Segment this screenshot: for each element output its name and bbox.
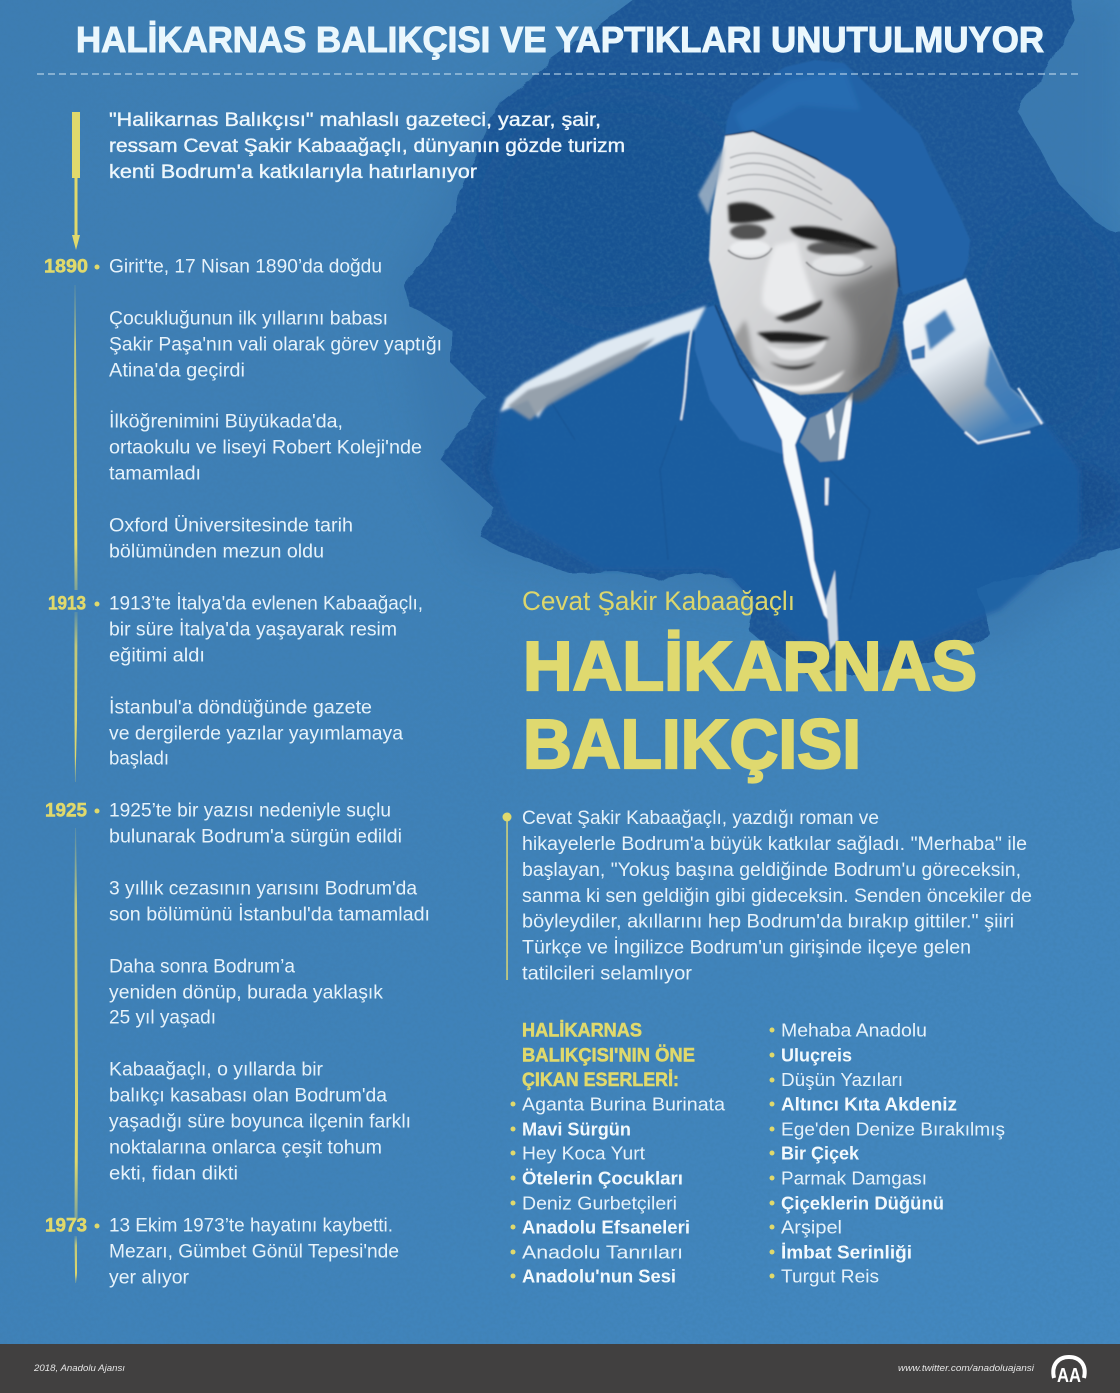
timeline text: ve dergilerde yazılar yayımlamaya [109, 724, 403, 744]
timeline text: İstanbul'a döndüğünde gazete [109, 698, 372, 718]
timeline text [109, 256, 442, 1288]
works list: left column: Anadolu'nun Sesi [522, 1266, 676, 1286]
timeline text: Şakir Paşa'nın vali olarak görev yaptığı [109, 334, 442, 356]
timeline text: 25 yıl yaşadı [109, 1008, 216, 1028]
works list: left column: Deniz Gurbetçileri [522, 1192, 677, 1214]
timeline text: ortaokulu ve liseyi Robert Koleji'nde [109, 438, 422, 458]
timeline text: tamamladı [109, 464, 201, 484]
hair [698, 145, 725, 215]
cheek shadow [733, 320, 763, 372]
nose [762, 240, 815, 315]
timeline text: Oxford Üniversitesinde tarih [109, 516, 353, 536]
sleeve cuff [965, 388, 1042, 443]
works list: left column: Mavi Sürgün [522, 1118, 631, 1140]
lapel [695, 305, 790, 455]
intro arrow [72, 112, 80, 250]
footer [0, 1344, 1120, 1393]
paragraph: hikayelerle Bodrum'a büyük katkılar sağladı. "Merhaba" ile [522, 834, 1027, 855]
works heading: ÇIKAN ESERLERİ: [522, 1070, 679, 1091]
works list: right column: İmbat Serinliği [781, 1242, 912, 1262]
shirt [752, 378, 832, 625]
works list: right column: Parmak Damgası [781, 1168, 927, 1188]
shoulder highlight [500, 306, 706, 418]
eye sockets [730, 224, 766, 240]
jacket seam [681, 322, 693, 420]
intro text: kenti Bodrum'a katkılarıyla hatırlanıyor [109, 162, 478, 183]
timeline text: bölümünden mezun oldu [109, 542, 324, 562]
works list: left column: Ötelerin Çocukları [522, 1168, 683, 1188]
timeline years: 1890 [44, 256, 88, 278]
timeline years: 1925 [45, 800, 87, 822]
timeline text: 13 Ekim 1973’te hayatını kaybetti. [109, 1216, 393, 1236]
timeline text: noktalarına onlarca çeşit tohum [109, 1138, 382, 1158]
timeline text: bir süre İtalya'da yaşayarak resim [109, 620, 397, 640]
timeline text: Çocukluğunun ilk yıllarını babası [109, 308, 388, 330]
timeline text: Girit'te, 17 Nisan 1890’da doğdu [109, 256, 382, 278]
works list: right column: Arşipel [781, 1216, 842, 1238]
works heading: HALİKARNAS [522, 1020, 642, 1042]
works list: left column: Hey Koca Yurt [522, 1142, 645, 1164]
timeline text: Daha sonra Bodrum’a [109, 956, 295, 978]
timeline text: Mezarı, Gümbet Gönül Tepesi'nde [109, 1242, 399, 1262]
timeline years: 1913 [48, 594, 86, 614]
works list: right column: Ege'den Denize Bırakılmış [781, 1118, 1005, 1140]
main heading: HALİKARNAS [523, 627, 977, 705]
timeline text: yer alıyor [109, 1268, 190, 1288]
timeline text: başladı [109, 748, 169, 770]
icon: AA logo: AA [1057, 1365, 1081, 1387]
works list: right column: Turgut Reis [781, 1266, 879, 1286]
main heading: BALIKÇISI [523, 705, 861, 783]
face [708, 130, 900, 396]
subtitle: name: Cevat Şakir Kabaağaçlı [522, 586, 795, 616]
paragraph: sanma ki sen geldiğin gibi gideceksin. Senden öncekiler de [522, 886, 1032, 907]
timeline text: balıkçı kasabası olan Bodrum'da [109, 1086, 387, 1106]
works list: left column [510, 1094, 726, 1286]
timeline text: Atina'da geçirdi [109, 360, 245, 382]
works list: left column: Anadolu Efsaneleri [522, 1216, 690, 1238]
intro text: "Halikarnas Balıkçısı" mahlaslı gazeteci, yazar, şair, [109, 110, 601, 131]
jaw beard shadow [848, 330, 899, 402]
works list: right column: Altıncı Kıta Akdeniz [781, 1094, 957, 1114]
jacket [490, 305, 1080, 650]
timeline text: ekti, fidan dikti [109, 1164, 238, 1184]
works heading [522, 1020, 695, 1091]
under-eye bags [728, 248, 872, 275]
forehead wrinkles [727, 153, 842, 220]
footer credit: 2018, Anadolu Ajansı [33, 1363, 125, 1374]
timeline text: 1925’te bir yazısı nedeniyle suçlu [109, 800, 391, 822]
works heading: BALIKÇISI'NIN ÖNE [522, 1046, 695, 1066]
timeline years [44, 256, 88, 1236]
works list: right column: Uluçreis [781, 1044, 852, 1066]
portrait of Cevat Şakir Kabaağaçlı [490, 60, 1080, 650]
eyebrows [728, 202, 775, 223]
title: HALİKARNAS BALIKÇISI VE YAPTIKLARI UNUTULMUYOR [76, 19, 1044, 60]
jacket fold lines [550, 400, 870, 600]
paragraph: tatilcileri selamlıyor [522, 964, 693, 984]
timeline text: yeniden dönüp, burada yaklaşık [109, 982, 383, 1004]
works list: left column: Anadolu Tanrıları [522, 1242, 683, 1262]
works list: left column: Aganta Burina Burinata [522, 1094, 726, 1114]
paragraph: böyleydiler, akıllarını hep Bodrum'da bırakıp gittiler." şiiri [522, 912, 1014, 932]
intro text [109, 110, 625, 183]
timeline text: bulunarak Bodrum'a sürgün edildi [109, 826, 402, 848]
timeline text: son bölümünü İstanbul'da tamamladı [109, 904, 430, 926]
footer link: www.twitter.com/anadoluajansi [898, 1363, 1035, 1374]
timeline text: eğitimi aldı [109, 646, 205, 666]
icon: AA logo [1053, 1357, 1085, 1387]
paragraph: Türkçe ve İngilizce Bodrum'un girişinde ilçeye gelen [522, 938, 971, 958]
timeline years: 1973 [45, 1216, 87, 1236]
works list: right column: Mehaba Anadolu [781, 1020, 927, 1040]
works list: right column: Çiçeklerin Düğünü [781, 1192, 944, 1214]
paragraph: Cevat Şakir Kabaağaçlı, yazdığı roman ve [522, 808, 879, 829]
mouth [757, 332, 830, 343]
timeline text: İlköğrenimini Büyükada'da, [109, 412, 343, 432]
timeline text: Kabaağaçlı, o yıllarda bir [109, 1060, 324, 1080]
timeline text: 3 yıllık cezasının yarısını Bodrum'da [109, 878, 417, 900]
timeline text: yaşadığı süre boyunca ilçenin farklı [109, 1112, 411, 1132]
intro text: ressam Cevat Şakir Kabaağaçlı, dünyanın gözde turizm [109, 136, 625, 157]
timeline text: 1913’te İtalya'da evlenen Kabaağaçlı, [109, 594, 423, 614]
hat [725, 60, 970, 295]
paragraph marker [502, 812, 512, 980]
hand [903, 278, 1045, 443]
works list: right column: Bir Çiçek [781, 1142, 860, 1164]
watercolour wash [390, 0, 1120, 673]
works list: right column [770, 1020, 1005, 1286]
paragraph: başlayan, "Yokuş başına geldiğinde Bodrum'u göreceksin, [522, 860, 1021, 881]
timeline bullets [94, 264, 100, 1228]
paragraph [522, 808, 1032, 984]
main heading [523, 627, 977, 783]
works list: right column: Düşün Yazıları [781, 1069, 903, 1090]
timeline line [74, 285, 78, 1283]
dashed divider [37, 73, 1081, 75]
